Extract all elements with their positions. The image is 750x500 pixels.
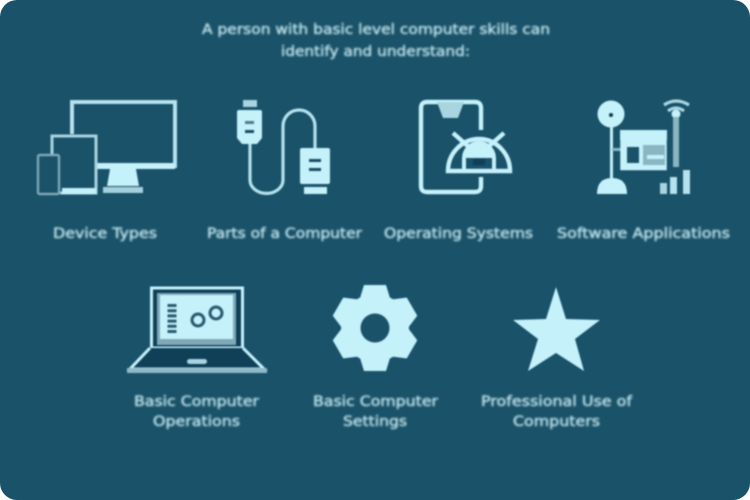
item: basic computer settings [313, 285, 438, 430]
label: basic computer operations: Operations [153, 414, 240, 430]
item: software applications [557, 100, 730, 242]
item: device types [38, 102, 175, 242]
title: identify and understand: [281, 44, 470, 60]
label: operating systems: Operating Systems [384, 226, 533, 242]
icon: devices [38, 102, 175, 194]
label: software applications: Software Applications [557, 226, 730, 242]
label: professional use of computers: Computers [513, 414, 600, 430]
icon: usb cable [237, 100, 330, 194]
label: basic computer operations: Basic Computer [134, 394, 259, 410]
label: parts of a computer: Parts of a Computer [207, 226, 362, 242]
icon: phone with android [421, 102, 510, 192]
label: professional use of computers: Professional Use of [481, 394, 633, 410]
title [202, 22, 550, 60]
icon: software network [597, 100, 690, 194]
item: professional use of computers [481, 287, 633, 430]
label: basic computer settings: Basic Computer [313, 394, 438, 410]
label: basic computer settings: Settings [343, 414, 407, 430]
item: basic computer operations [127, 288, 267, 430]
title: A person with basic level computer skills can [202, 22, 550, 38]
label: basic computer settings [313, 394, 438, 430]
item: operating systems [384, 102, 533, 242]
icon: star [513, 287, 600, 371]
label: basic computer operations [134, 394, 259, 430]
icon: laptop [127, 288, 267, 373]
label: device types: Device Types [53, 226, 157, 242]
item: parts of a computer [207, 100, 362, 242]
label: professional use of computers [481, 394, 633, 430]
icon: gear [331, 285, 419, 371]
